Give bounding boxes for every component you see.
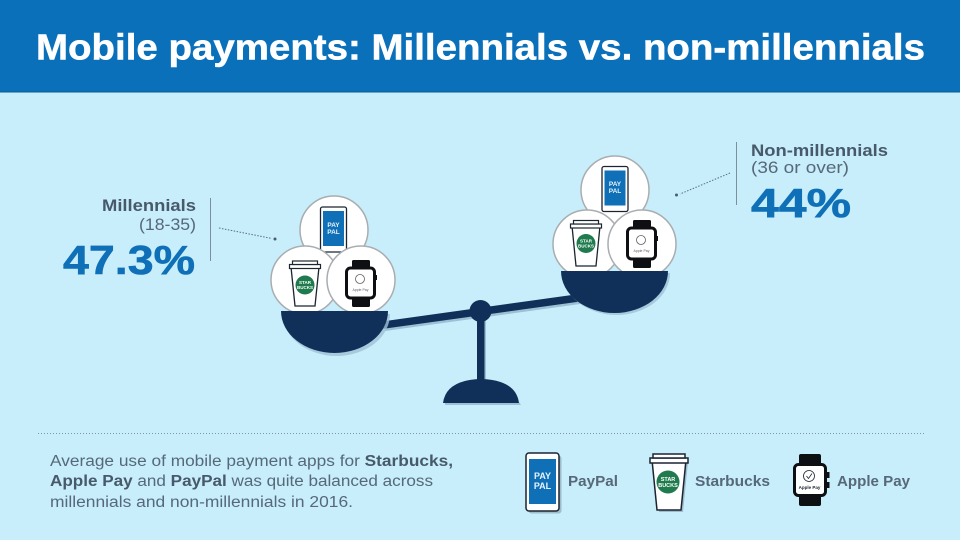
icon: cup: BUCKS	[658, 483, 678, 489]
description text: Apple Pay and PayPal was quite balanced across	[50, 473, 433, 490]
legend item: apple pay: Apple Pay	[837, 474, 910, 490]
icon: phone	[526, 453, 562, 514]
legend item: paypal: PayPal	[568, 474, 618, 490]
icon: phone: PAL	[534, 481, 552, 491]
circle: paypal	[581, 156, 649, 224]
legend	[526, 453, 910, 514]
circle: starbucks	[553, 210, 621, 278]
icon: phone: PAY	[327, 222, 340, 229]
icon: cup: STAR	[580, 238, 593, 244]
icon: watch: Apple Pay	[353, 288, 369, 292]
icon: cup: STAR	[661, 477, 675, 483]
icon: cup: BUCKS	[578, 244, 594, 248]
balance scale	[380, 297, 585, 405]
icon: watch: Apple Pay	[799, 485, 821, 490]
icon: phone	[602, 166, 628, 212]
icon: watch: Apple Pay	[634, 249, 650, 253]
scale beam	[380, 297, 585, 326]
icon: phone: PAY	[609, 181, 622, 188]
scale pivot	[470, 300, 492, 322]
legend item: starbucks: Starbucks	[695, 474, 770, 490]
scale shadow	[385, 301, 580, 405]
icon: cup	[290, 261, 320, 306]
left pan	[283, 314, 390, 356]
icon: phone: PAL	[327, 229, 340, 236]
label: non-millennials: Non-millennials	[751, 142, 888, 160]
scale post	[477, 311, 484, 383]
icon: phone: PAL	[609, 188, 621, 195]
callout: millennials	[63, 197, 276, 283]
description text	[50, 453, 453, 511]
icon: phone	[320, 207, 346, 252]
header banner	[0, 0, 960, 92]
icon: cup	[570, 220, 602, 266]
circle: apple pay	[327, 246, 395, 314]
label: millennials: Millennials	[102, 197, 196, 215]
stat: 47.3%: 47.3%	[63, 237, 195, 283]
right pan with icons	[553, 156, 676, 315]
stat: 44%: 44%	[751, 180, 851, 226]
description text: Average use of mobile payment apps for Starbucks,	[50, 453, 453, 470]
left pan with icons	[271, 196, 395, 356]
icon: cup: BUCKS	[297, 285, 313, 290]
title: Mobile payments: Millennials vs. non-millennials	[36, 26, 925, 68]
description text: millennials and non-millennials in 2016.	[50, 494, 353, 511]
circle: paypal	[300, 196, 368, 264]
label: age 18-35: (18-35)	[139, 215, 196, 234]
icon: phone: PAY	[534, 471, 551, 481]
legend item: paypal	[526, 453, 618, 514]
right pan	[563, 273, 670, 315]
callout: non-millennials	[675, 142, 888, 226]
scale base	[443, 379, 519, 403]
label: 36 or over: (36 or over)	[751, 158, 849, 177]
legend item: apple pay	[794, 454, 910, 506]
circle: apple pay	[608, 210, 676, 278]
legend item: starbucks	[650, 454, 770, 512]
icon: cup: STAR	[299, 280, 312, 285]
icon: cup	[650, 454, 688, 512]
circle: starbucks	[271, 246, 339, 314]
